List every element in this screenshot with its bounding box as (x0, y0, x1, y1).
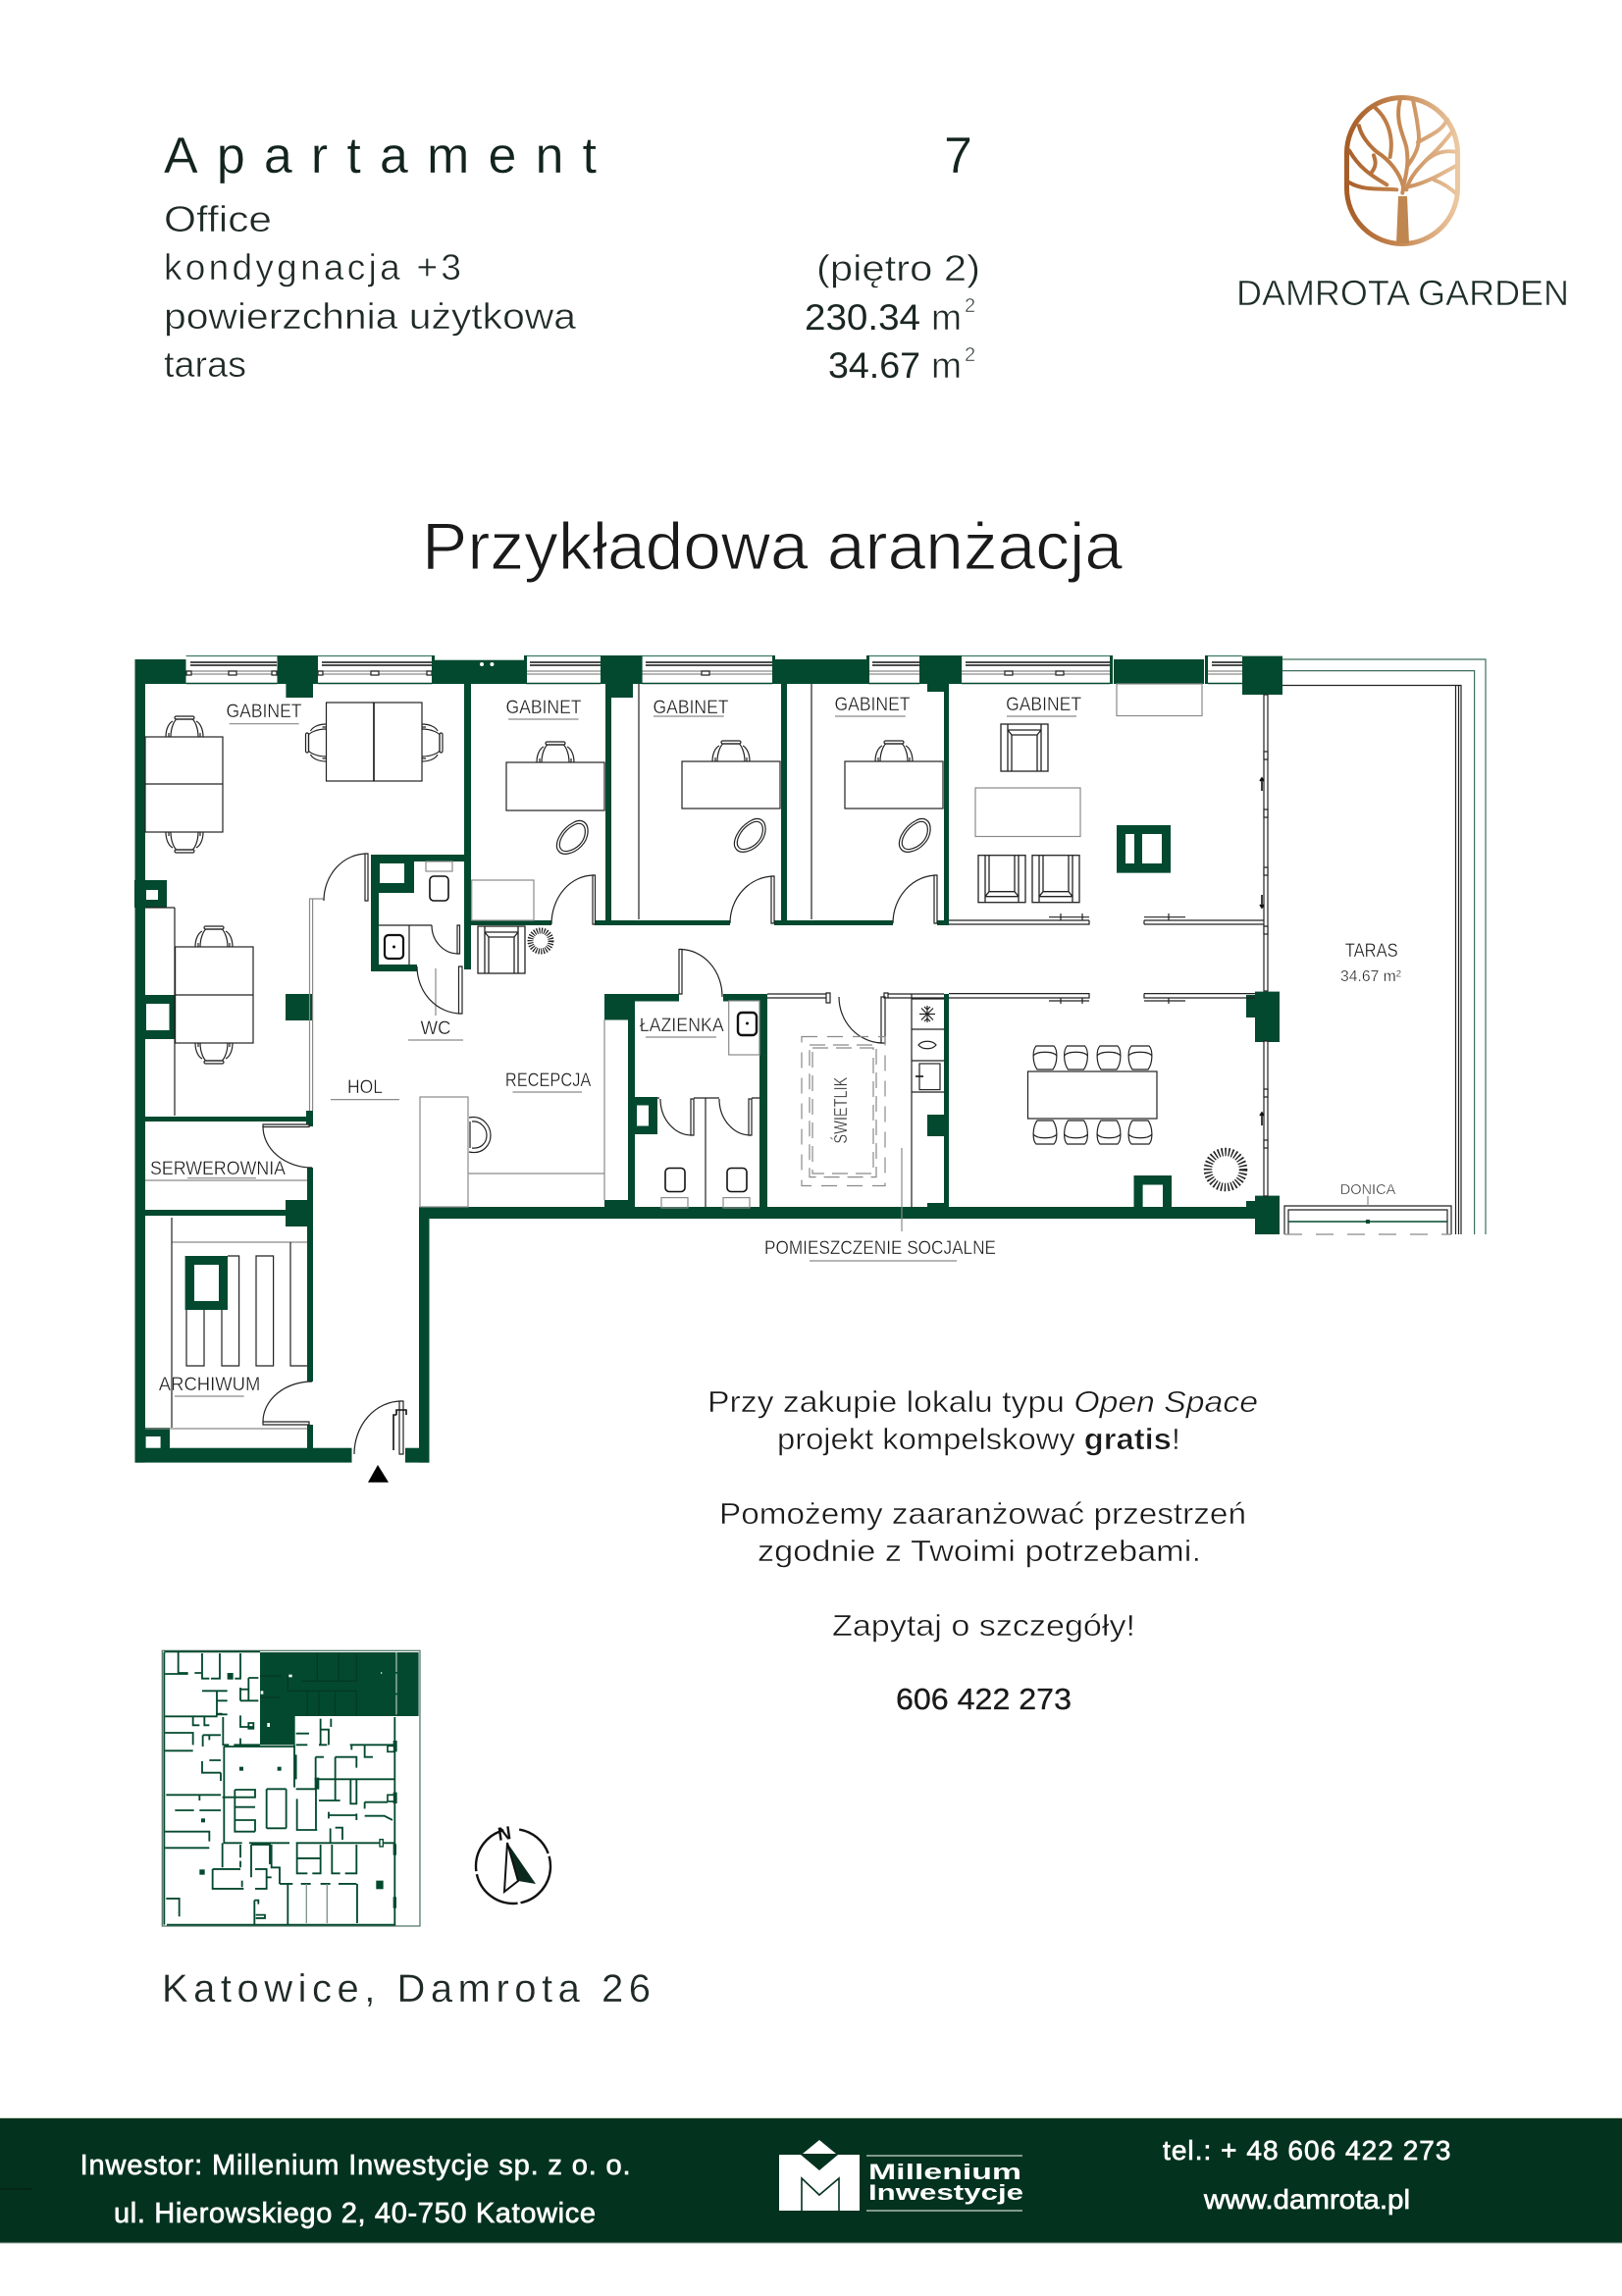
highlighted apartment (260, 1652, 419, 1745)
title: apartment number heading: 7 (944, 128, 972, 184)
text block: open space offer: projekt kompelskowy gratis! (777, 1422, 1180, 1456)
text block: apartment details: 230.34 (805, 297, 920, 338)
text block: apartment details: taras (164, 344, 246, 385)
furniture: gabinet 5 lounge (975, 684, 1202, 903)
dining table and chairs (1028, 1046, 1243, 1187)
text block: apartment details: 2 (965, 295, 975, 317)
furniture: wc and bathroom (385, 861, 759, 1208)
logo: Damrota Garden tree: DAMROTA GARDEN (1236, 273, 1569, 313)
terrace outline (1282, 659, 1486, 1234)
planter on terrace (1284, 1196, 1451, 1234)
room labels: GABINET (1006, 695, 1081, 715)
furniture: gabinet 1 desks (145, 703, 443, 1064)
text block: open space offer (707, 1384, 1258, 1716)
skylight (802, 1036, 885, 1185)
walls (135, 655, 1282, 1463)
contact details: tel.: + 48 606 422 273 (1163, 2135, 1450, 2166)
text block: apartment details: m (931, 297, 962, 338)
room labels: GABINET (226, 702, 302, 722)
room labels: ARCHIWUM (159, 1375, 260, 1395)
text block: open space offer: Zapytaj o szczegóły! (832, 1608, 1135, 1643)
room labels: GABINET (654, 698, 729, 718)
investor address (80, 2150, 631, 2229)
room labels: SERWEROWNIA (150, 1159, 286, 1179)
building key plan (162, 1650, 420, 1926)
footer band (0, 2117, 1622, 2243)
room labels: GABINET (506, 698, 582, 718)
text block: apartment details: kondygnacja +3 (164, 247, 461, 287)
text block: apartment details: powierzchnia użytkowa (164, 296, 576, 337)
furniture: gabinet 2 to 4 desks (472, 741, 943, 920)
shafts (134, 662, 1172, 1448)
text block: apartment details: Office (164, 199, 272, 239)
icon: entrance triangle (368, 1465, 389, 1483)
floor plan (134, 655, 1486, 1483)
text block: apartment details: (piętro 2) (816, 248, 980, 288)
glazing to terrace (1260, 695, 1268, 1196)
room labels: ŁAZIENKA (640, 1016, 724, 1036)
contact details: www.damrota.pl (1203, 2184, 1410, 2215)
thin interior lines (145, 684, 1265, 1429)
logo: Millenium Inwestycje: Millenium (868, 2160, 1021, 2184)
room labels: POMIESZCZENIE SOCJALNE (764, 1238, 996, 1259)
room labels (150, 695, 1402, 1396)
text block: apartment details (164, 199, 980, 386)
text block: apartment details: 34.67 (828, 345, 920, 386)
doors (263, 854, 937, 1454)
logo: Millenium Inwestycje: Inwestycje (868, 2180, 1023, 2205)
text block: apartment details: m (931, 345, 962, 386)
icon: north compass (476, 1823, 550, 1904)
text block: open space offer: 606 422 273 (896, 1682, 1072, 1716)
text block: open space offer: Przy zakupie lokalu typu Open Space (707, 1384, 1258, 1419)
contact details (1163, 2135, 1450, 2215)
text block: apartment details: 2 (965, 344, 975, 366)
title: apartment number heading: Apartament (164, 128, 598, 184)
investor address: ul. Hierowskiego 2, 40-750 Katowice (114, 2198, 596, 2229)
heading: example arrangement: Przykładowa aranżacja (422, 509, 1123, 584)
room labels: RECEPCJA (505, 1070, 592, 1091)
windows (186, 655, 1242, 683)
room labels: HOL (347, 1077, 383, 1098)
logo: Damrota Garden tree (1236, 98, 1569, 313)
furniture: reception (420, 926, 551, 1207)
key plan walls (164, 1651, 395, 1925)
title: apartment number heading (164, 128, 972, 184)
location caption: Katowice, Damrota 26 (162, 1967, 651, 2010)
key plan highlight details (260, 1652, 396, 1727)
room labels: 34.67 m² (1340, 968, 1402, 985)
room labels: TARAS (1345, 941, 1398, 962)
kitchen units (912, 999, 944, 1092)
skylight: ŚWIETLIK (830, 1077, 851, 1144)
text block: open space offer: Pomożemy zaaranżować przestrzeń (719, 1496, 1246, 1531)
text block: open space offer: zgodnie z Twoimi potrzebami. (758, 1534, 1201, 1568)
room labels: WC (420, 1018, 451, 1039)
logo: Millenium Inwestycje (779, 2140, 1023, 2211)
key plan columns (199, 1673, 397, 1908)
icon: north compass: N (497, 1823, 512, 1846)
investor address: Inwestor: Millenium Inwestycje sp. z o. o. (80, 2150, 631, 2181)
room labels: DONICA (1340, 1181, 1395, 1198)
room labels: GABINET (834, 695, 911, 715)
archive shelves (186, 1242, 307, 1366)
